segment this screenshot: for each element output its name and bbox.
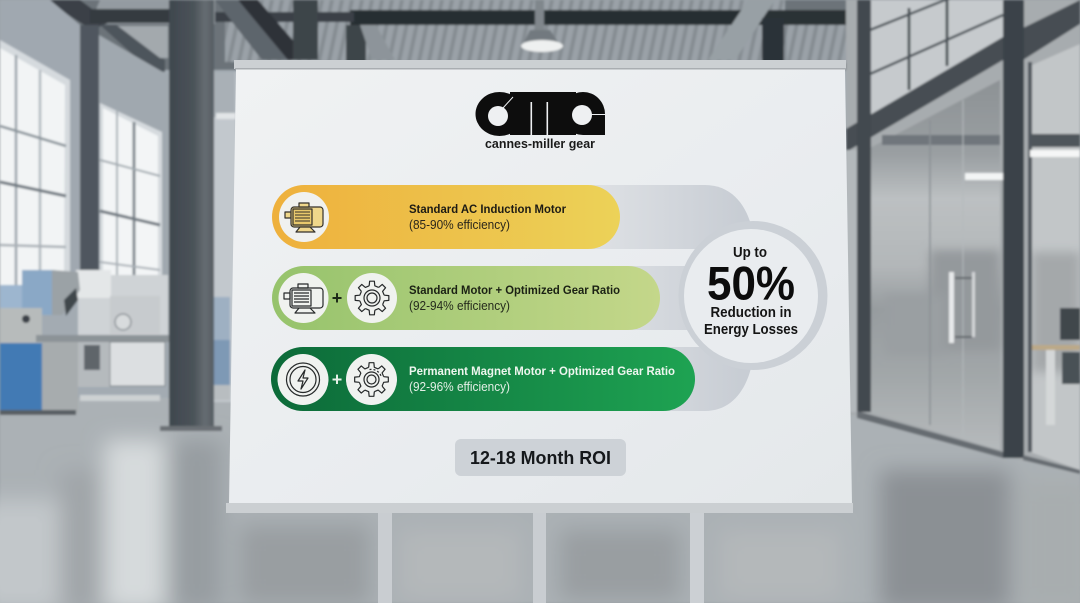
ceiling xyxy=(45,0,860,72)
logo wordmark: cannes-miller gear xyxy=(485,137,595,151)
tier efficiency: (85-90% efficiency) xyxy=(409,218,510,232)
bar xyxy=(272,266,660,330)
circle ring xyxy=(678,221,828,370)
reduction caption: Reduction in xyxy=(710,305,792,321)
bar xyxy=(271,347,695,411)
factory machines xyxy=(0,270,169,415)
bottom rail xyxy=(226,503,853,513)
circle face xyxy=(684,229,818,363)
tier 2: standard motor + optimized gear ratio xyxy=(272,266,660,330)
right glass office wall xyxy=(846,0,1080,474)
top rail xyxy=(234,60,846,70)
logo mark xyxy=(476,92,605,136)
easel legs xyxy=(378,513,704,603)
left wall and windows xyxy=(0,0,168,300)
tier title: Permanent Magnet Motor + Optimized Gear Ratio xyxy=(409,364,675,378)
tier title: Standard Motor + Optimized Gear Ratio xyxy=(409,283,620,297)
plus sign: + xyxy=(332,288,342,308)
icon: gear xyxy=(347,273,397,323)
icon: motor, coloured xyxy=(279,192,329,242)
floor xyxy=(0,398,1080,603)
grey connector bands to the result circle xyxy=(590,185,751,411)
tier 3: permanent magnet motor + optimized gear ratio xyxy=(271,347,695,411)
main steel column xyxy=(160,0,222,431)
icon: high-efficiency gear xyxy=(346,354,397,405)
tier efficiency: (92-96% efficiency) xyxy=(409,380,510,394)
ROI badge: 12-18 Month ROI xyxy=(470,448,611,468)
bar xyxy=(272,185,620,249)
icon: permanent magnet motor xyxy=(278,354,328,405)
plus sign: + xyxy=(332,370,342,390)
tier efficiency: (92-94% efficiency) xyxy=(409,299,510,313)
50 percent figure: 50% xyxy=(707,256,795,310)
tier 1: standard AC induction motor xyxy=(272,185,620,249)
rear wall behind poster xyxy=(214,72,236,402)
poster board xyxy=(226,60,853,513)
result circle xyxy=(678,221,828,370)
tier title: Standard AC Induction Motor xyxy=(409,202,566,216)
energy losses caption: Energy Losses xyxy=(704,322,798,338)
ROI badge xyxy=(455,439,626,476)
poster panel xyxy=(229,69,852,504)
up to label: Up to xyxy=(733,245,767,261)
icon: motor xyxy=(278,273,328,323)
company logo xyxy=(476,92,605,151)
